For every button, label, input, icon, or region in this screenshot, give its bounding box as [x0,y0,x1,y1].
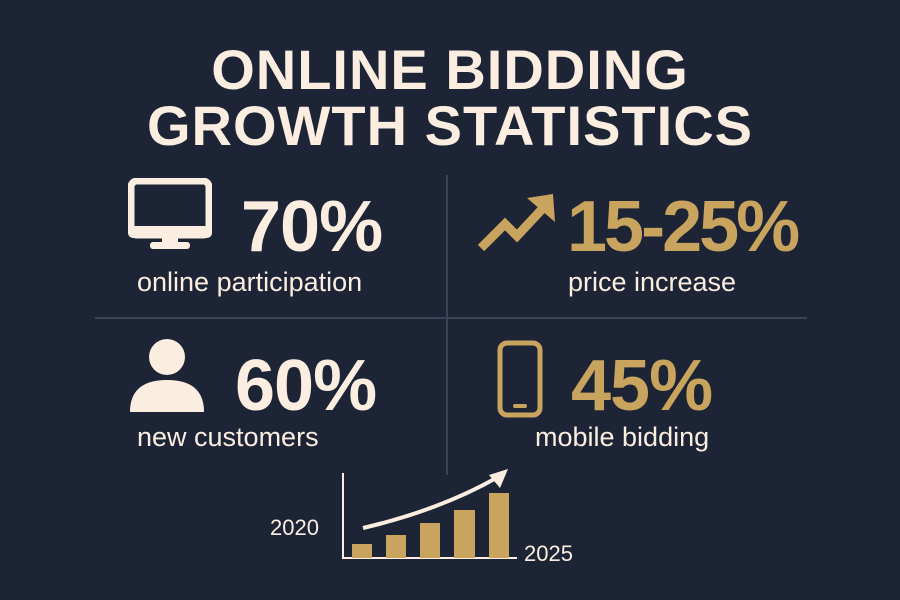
label: price increase [568,267,736,297]
stat 15-25%: 15-25% [567,187,797,267]
chart: growth 2020-2025: 2020 [270,515,319,540]
panel: new customers [130,339,376,452]
stat 45%: 45% [571,346,712,426]
icon: monitor [128,178,212,249]
panel: price increase [478,187,798,297]
label: new customers [137,422,319,452]
panel: online participation [128,178,382,297]
stat 70%: 70% [241,187,382,267]
icon: person [130,339,204,412]
panel: mobile bidding [498,340,712,452]
title [147,38,753,157]
stat 60%: 60% [235,346,376,426]
chart: growth 2020-2025 [270,469,573,565]
title: GROWTH STATISTICS [147,94,753,157]
title: ONLINE BIDDING [211,38,689,101]
label: online participation [137,267,362,297]
icon: trend arrow [478,194,555,252]
icon: phone [498,340,542,418]
label: mobile bidding [535,422,709,452]
